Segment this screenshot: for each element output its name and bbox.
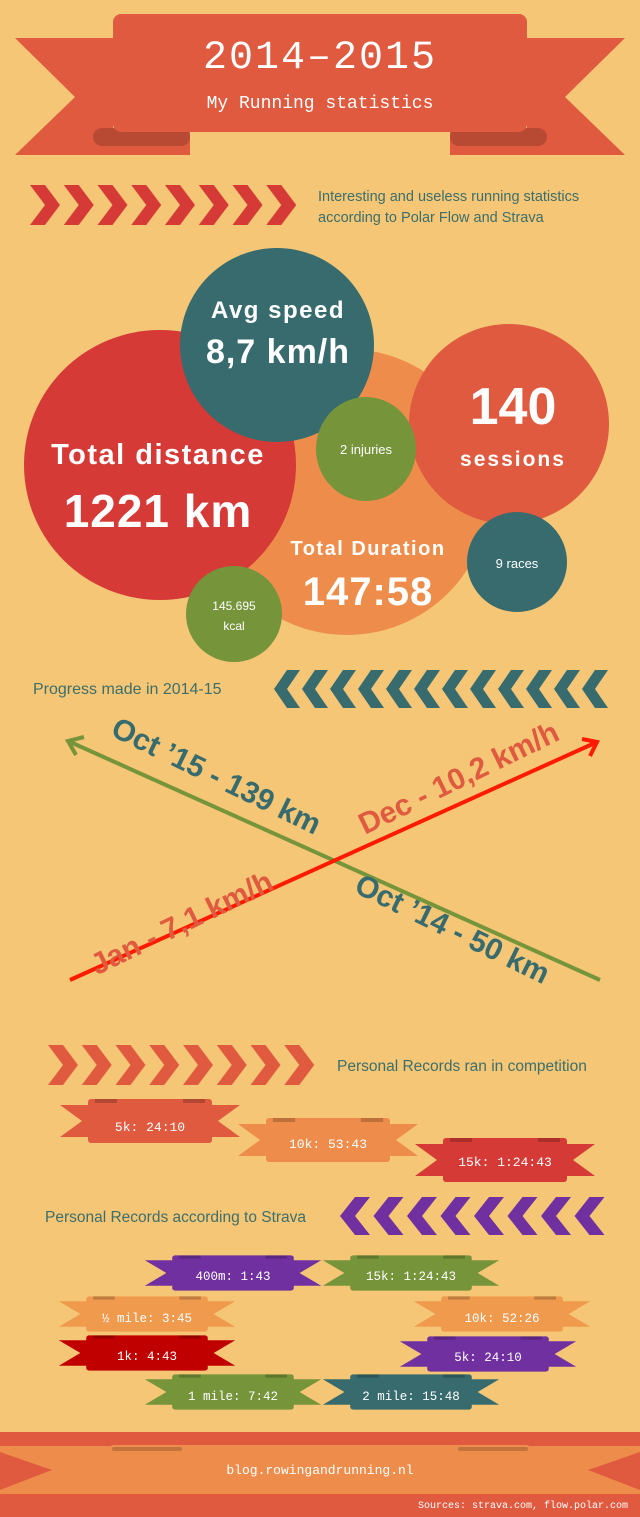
bubble chart: 1221 km [64,485,252,537]
strava heading: Personal Records according to Strava [45,1209,306,1226]
competition records ribbons [60,1099,595,1182]
bubble chart: 8,7 km/h [206,333,350,371]
title banner [15,14,625,155]
competition heading: Personal Records ran in competition [337,1058,587,1075]
strava records ribbons: 10k: 52:26 [464,1312,540,1326]
sources: Sources: strava.com, flow.polar.com [418,1500,628,1512]
progress arrows chart: Dec - 10,2 km/h [353,716,564,841]
intro text: Interesting and useless running statistics [318,189,579,205]
progress arrows chart [68,712,600,991]
chevrons: progress [272,670,608,708]
competition records ribbons: 5k: 24:10 [115,1120,185,1135]
bubble chart: 145.695 [212,599,256,613]
strava records ribbons: ½ mile: 3:45 [102,1312,192,1326]
progress arrows chart: Oct ’15 - 139 km [106,712,326,841]
title text: 2014–2015 [203,36,437,81]
bubble chart: Total distance [51,439,265,471]
strava records ribbons: 15k: 1:24:43 [366,1270,456,1284]
bubble chart: 140 [470,378,556,436]
bubble chart: 147:58 [303,570,433,614]
chevrons: competition [48,1045,318,1085]
progress heading: Progress made in 2014-15 [33,681,222,698]
bubble chart: sessions [460,448,566,471]
chevrons: strava [337,1197,605,1235]
strava records ribbons: 2 mile: 15:48 [362,1390,460,1404]
footer [0,1432,640,1517]
competition records ribbons: 10k: 53:43 [289,1137,367,1152]
strava records ribbons [59,1255,590,1410]
competition records ribbons: 15k: 1:24:43 [458,1155,552,1170]
strava records ribbons: 1k: 4:43 [117,1350,177,1364]
bubble chart: Total Duration [290,538,446,560]
bubble chart [24,248,609,662]
chevrons: intro [30,185,300,225]
bubble chart: 2 injuries [340,442,393,457]
footer url: blog.rowingandrunning.nl [226,1463,414,1478]
bubble chart: Avg speed [211,297,345,324]
subtitle: My Running statistics [207,94,433,114]
strava records ribbons: 1 mile: 7:42 [188,1390,278,1404]
strava records ribbons: 5k: 24:10 [454,1351,522,1365]
bubble chart: 9 races [496,556,539,571]
progress arrows chart: Oct ’14 - 50 km [350,868,555,991]
intro text: according to Polar Flow and Strava [318,210,545,226]
progress arrows chart: Jan - 7,1 km/h [85,865,278,982]
strava records ribbons: 400m: 1:43 [195,1270,271,1284]
bubble chart: kcal [223,619,245,633]
